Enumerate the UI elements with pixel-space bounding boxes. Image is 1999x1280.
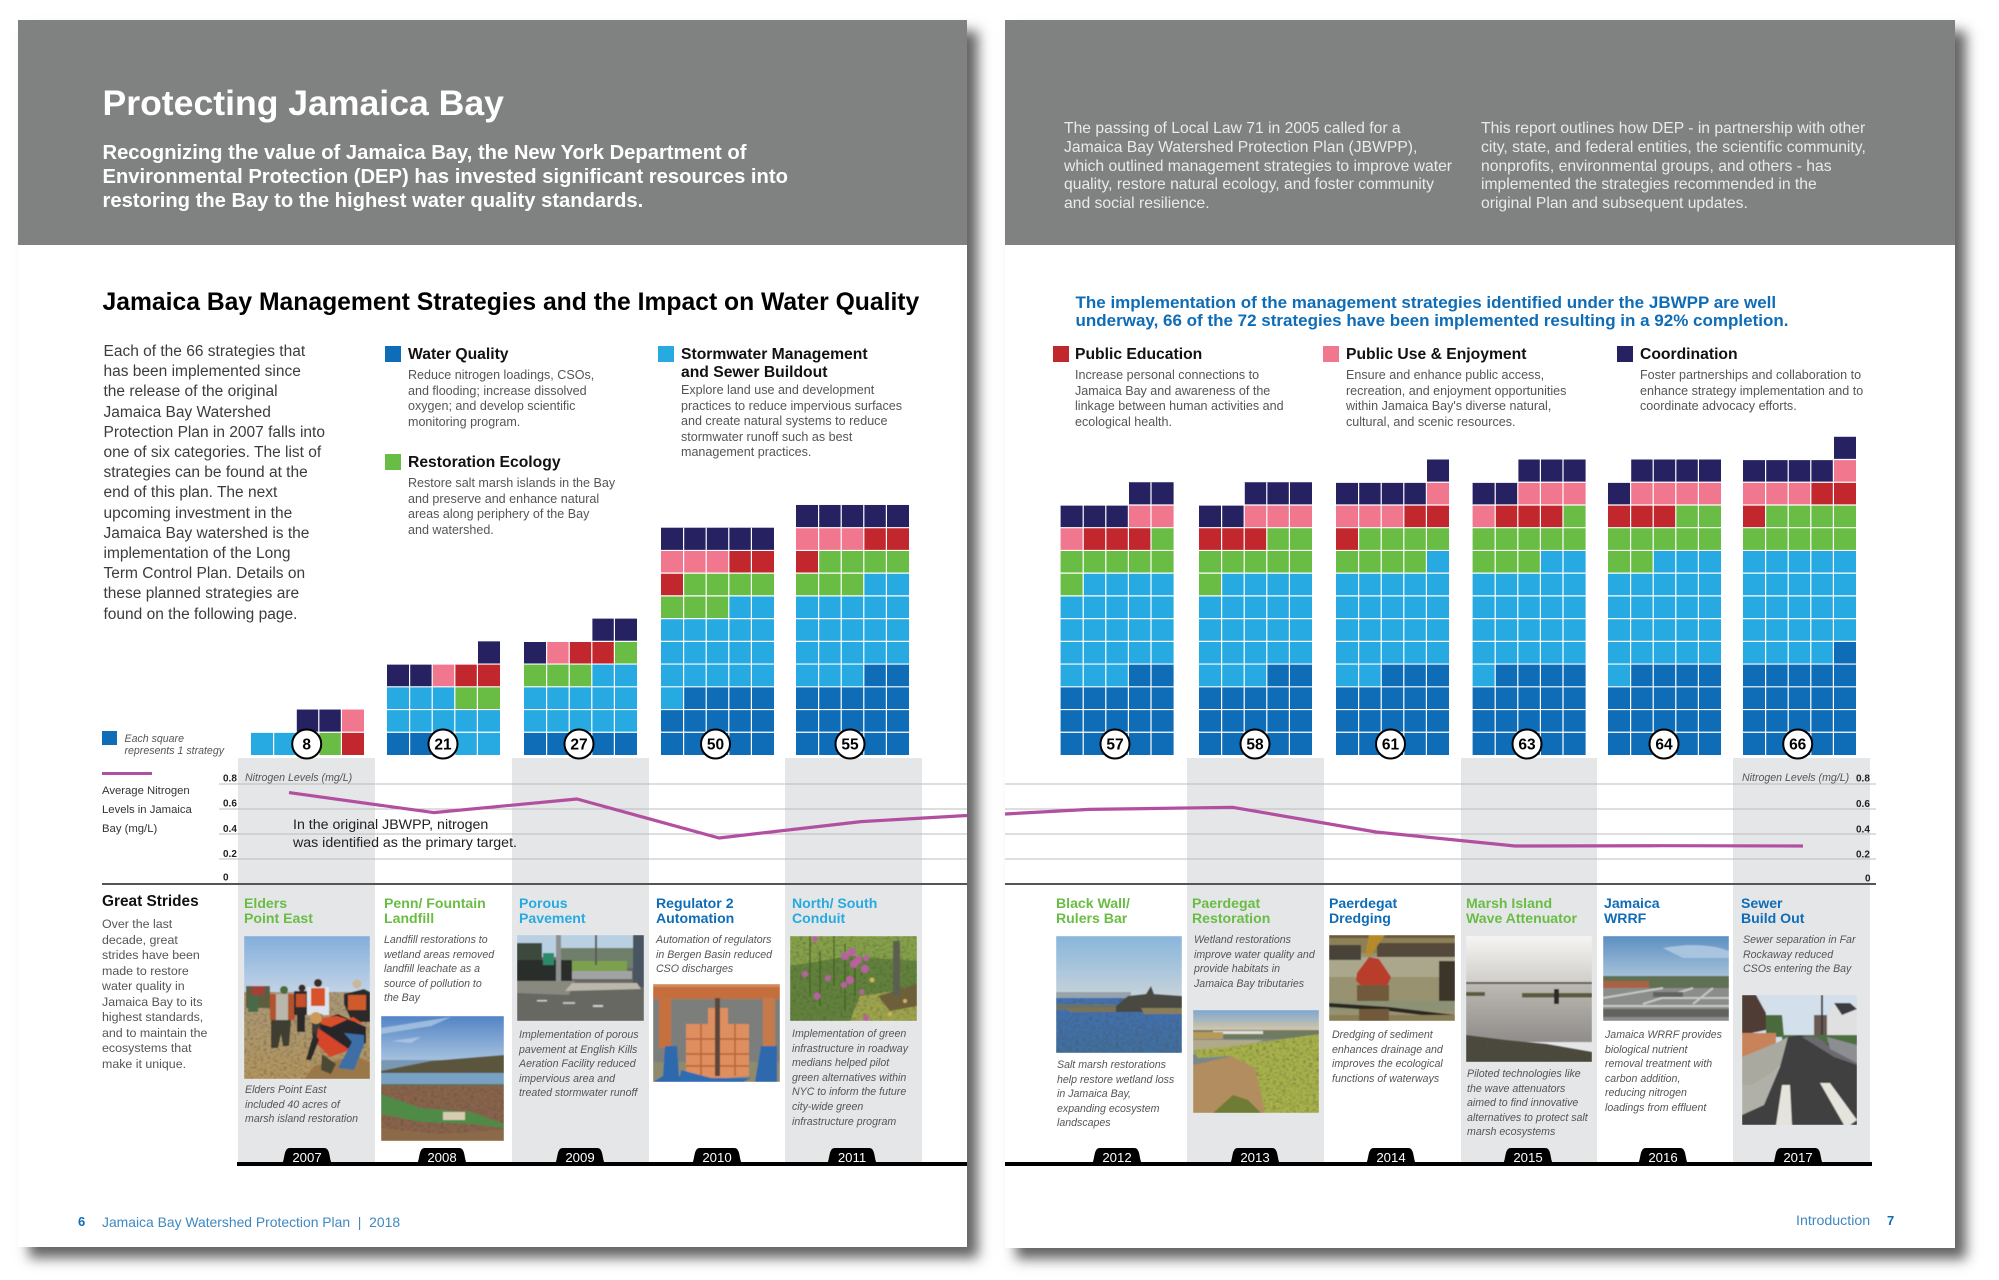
intro paragraph: the release of the original <box>104 383 278 400</box>
caption: North/ South Conduit: green alternatives within <box>792 1072 906 1084</box>
legend: public education: Jamaica Bay and awareness of the <box>1075 384 1270 398</box>
header text column 1 <box>1064 120 1452 212</box>
blue key message: underway, 66 of the 72 strategies have been implemented resulting in a 92% completion. <box>1076 311 1788 330</box>
year tab 2014 <box>1366 1148 1416 1162</box>
legend: nitrogen line: Levels in Jamaica <box>102 804 192 816</box>
caption: Paerdegat Dredging: Dredging of sediment <box>1332 1029 1433 1041</box>
column heading: Jamaica WRRF: WRRF <box>1604 910 1646 926</box>
legend: coordination: Coordination <box>1640 346 1738 363</box>
legend: restoration ecology: and watershed. <box>408 522 494 536</box>
count badges: 21 <box>434 736 452 754</box>
chart annotation: was identified as the primary target. <box>293 835 517 851</box>
column heading: Black Wall/ Rulers Bar: Rulers Bar <box>1056 910 1127 926</box>
intro paragraph: implementation of the Long <box>104 545 290 562</box>
legend: stormwater: Explore land use and development <box>681 383 874 397</box>
caption: Black Wall/ Rulers Bar <box>1057 1059 1174 1129</box>
caption: Black Wall/ Rulers Bar: expanding ecosystem <box>1057 1103 1159 1115</box>
header band: right page <box>1005 20 1955 245</box>
chart: nitrogen levels right <box>1004 772 1876 885</box>
caption: Porous Pavement: Aeration Facility reduced <box>519 1058 636 1070</box>
count badges: 55 <box>841 736 859 754</box>
column heading: Penn/ Fountain Landfill: Landfill <box>384 910 434 926</box>
legend: each square: represents 1 strategy <box>124 745 224 757</box>
legend: restoration ecology: and preserve and enhance natural <box>408 492 599 506</box>
chart annotation: In the original JBWPP, nitrogen <box>293 817 488 833</box>
bar 2013 <box>1199 482 1312 755</box>
year tab 2011: 2011 <box>838 1150 866 1165</box>
legend: public education: Public Education <box>1075 346 1202 363</box>
column heading: North/ South Conduit <box>792 895 877 926</box>
caption: Paerdegat Dredging: enhances drainage and <box>1332 1044 1443 1056</box>
great strides text: Great Strides <box>102 893 199 910</box>
header text column 2: city, state, and federal entities, the scientific community, <box>1481 139 1866 156</box>
caption: North/ South Conduit: NYC to inform the future <box>792 1086 906 1098</box>
chart: nitrogen levels left: Nitrogen Levels (mg/L) <box>245 772 352 784</box>
column heading: North/ South Conduit: North/ South <box>792 895 877 911</box>
caption: Paerdegat Restoration: Wetland restorations <box>1194 934 1291 946</box>
column heading: Paerdegat Restoration: Paerdegat <box>1192 895 1260 911</box>
caption: Marsh Island Wave Attenuator: the wave attenuators <box>1467 1083 1565 1095</box>
legend: public use: within Jamaica Bay's diverse natural, <box>1346 399 1551 413</box>
timeline bar left <box>237 1162 967 1166</box>
caption: North/ South Conduit: infrastructure in roadway <box>792 1043 908 1055</box>
great strides text: water quality in <box>102 979 185 993</box>
photo: North/ South Conduit <box>790 936 917 1021</box>
caption: Elders Point East <box>245 1084 358 1125</box>
column heading: Jamaica WRRF <box>1604 896 1660 926</box>
year tab 2012: 2012 <box>1102 1150 1132 1165</box>
caption: Porous Pavement: pavement at English Kills <box>519 1044 637 1056</box>
caption: Marsh Island Wave Attenuator: marsh ecosystems <box>1467 1126 1555 1138</box>
intro paragraph: these planned strategies are <box>104 585 299 602</box>
chart: nitrogen levels right: 0.8 <box>1856 774 1870 784</box>
year tab 2013 <box>1230 1148 1280 1162</box>
column heading: North/ South Conduit: Conduit <box>792 910 845 926</box>
count badges: 57 <box>1106 736 1124 754</box>
count badges <box>1100 730 1812 758</box>
legend: restoration ecology: areas along periphery of the Bay <box>408 507 589 521</box>
intro paragraph: Jamaica Bay Watershed <box>104 404 271 421</box>
caption: Sewer Build Out: Rockaway reduced <box>1743 949 1833 961</box>
caption: Black Wall/ Rulers Bar: help restore wetland loss <box>1057 1074 1174 1086</box>
column band 2007 <box>238 758 375 1162</box>
bar 2008 <box>387 641 500 755</box>
chart: nitrogen levels right: Nitrogen Levels (mg/L) <box>1742 772 1849 784</box>
intro paragraph: found on the following page. <box>104 606 297 623</box>
header text column 2: This report outlines how DEP - in partnership with other <box>1481 120 1865 137</box>
column heading: Regulator 2 Automation: Automation <box>656 910 734 926</box>
header text column 1: quality, restore natural ecology, and foster community <box>1064 176 1434 193</box>
photo: Sewer Build Out <box>1742 995 1857 1125</box>
great strides text: made to restore <box>102 964 189 978</box>
panel: right page <box>1005 20 1955 1248</box>
great strides text: make it unique. <box>102 1056 186 1070</box>
year tab 2017 <box>1774 1148 1822 1162</box>
year tab 2016 <box>1638 1148 1688 1162</box>
caption: Sewer Build Out: Sewer separation in Far <box>1743 934 1855 946</box>
count badges <box>292 730 864 758</box>
column heading: Sewer Build Out: Sewer <box>1741 895 1783 911</box>
legend: coordination <box>1617 346 1863 413</box>
great strides text: highest standards, <box>102 1010 203 1024</box>
year tab 2010 <box>692 1148 742 1162</box>
legend: stormwater: Stormwater Management <box>681 346 868 363</box>
footer left: Jamaica Bay Watershed Protection Plan | 2018 <box>102 1214 400 1230</box>
legend: public education: Increase personal connections to <box>1075 368 1259 382</box>
year tab 2015: 2015 <box>1513 1150 1543 1165</box>
count badges: 63 <box>1518 736 1536 754</box>
title: Protecting Jamaica Bay <box>102 83 504 123</box>
legend: public use: recreation, and enjoyment opportunities <box>1346 384 1566 398</box>
caption: Elders Point East: Elders Point East <box>245 1084 326 1096</box>
bar 2009 <box>524 619 637 755</box>
year tab 2007 <box>282 1148 332 1162</box>
chart: nitrogen levels left: 0.4 <box>223 824 237 835</box>
legend: stormwater: stormwater runoff such as best <box>681 430 852 444</box>
column heading: Porous Pavement <box>519 895 586 926</box>
subtitle: Recognizing the value of Jamaica Bay, the New York Department of <box>102 142 746 164</box>
photo: Jamaica WRRF <box>1603 936 1729 1021</box>
year tab 2008: 2008 <box>427 1150 457 1165</box>
caption: Paerdegat Restoration <box>1194 934 1315 990</box>
column heading: Penn/ Fountain Landfill: Penn/ Fountain <box>384 895 486 911</box>
intro paragraph: Term Control Plan. Details on <box>104 565 305 582</box>
intro paragraph <box>104 343 325 623</box>
count badges: 61 <box>1382 736 1399 754</box>
header band: left page <box>18 20 967 245</box>
intro paragraph: upcoming investment in the <box>104 505 292 522</box>
bar 2015 <box>1473 460 1586 755</box>
chart: nitrogen levels left: 0.8 <box>223 774 237 784</box>
header text column 1: and social resilience. <box>1064 195 1210 212</box>
column heading: Paerdegat Restoration <box>1192 895 1270 926</box>
timeline bar right <box>1005 1162 1872 1166</box>
caption: Jamaica WRRF: Jamaica WRRF provides <box>1605 1029 1722 1041</box>
intro paragraph: Jamaica Bay watershed is the <box>104 525 309 542</box>
caption: Penn/ Fountain Landfill: Landfill restorations to <box>384 934 488 946</box>
column heading: Paerdegat Dredging <box>1329 896 1397 926</box>
legend: restoration ecology <box>385 454 616 536</box>
great strides text: decade, great <box>102 932 178 946</box>
legend: water quality: Water Quality <box>408 346 509 363</box>
photo: Elders Point East <box>244 936 370 1079</box>
column heading: Sewer Build Out <box>1741 896 1804 926</box>
column band 2015 <box>1461 758 1597 1162</box>
count badges: 64 <box>1655 736 1673 754</box>
photo: Marsh Island Wave Attenuator <box>1466 936 1592 1062</box>
great strides text: Over the last <box>102 917 172 931</box>
column heading: Regulator 2 Automation: Regulator 2 <box>656 895 734 911</box>
header text column 2: original Plan and subsequent updates. <box>1481 195 1748 212</box>
legend: public education: linkage between human activities and <box>1075 399 1284 413</box>
count badges: 58 <box>1246 736 1264 754</box>
legend: each square: Each square <box>124 733 184 745</box>
legend: public use: Ensure and enhance public access, <box>1346 368 1544 382</box>
legend: coordination: Foster partnerships and collaboration to <box>1640 368 1861 382</box>
great strides text: strides have been <box>102 948 200 962</box>
caption: Porous Pavement <box>518 1029 639 1099</box>
header text column 2: nonprofits, environmental groups, and others - has <box>1481 158 1832 175</box>
caption: Paerdegat Restoration: improve water quality and <box>1194 949 1315 961</box>
bar 2014 <box>1336 460 1449 755</box>
column heading: Black Wall/ Rulers Bar <box>1056 895 1130 926</box>
bar 2016 <box>1608 460 1721 755</box>
caption: Jamaica WRRF: loadings from effluent <box>1605 1102 1706 1114</box>
chart: nitrogen levels left: 0.6 <box>223 798 237 810</box>
column heading: Penn/ Fountain Landfill <box>384 895 486 926</box>
column heading: Paerdegat Dredging: Paerdegat <box>1329 895 1397 911</box>
legend: public use <box>1323 346 1566 428</box>
panel: left page <box>18 20 967 1247</box>
column heading: Elders Point East <box>244 895 313 926</box>
year tab 2014: 2014 <box>1376 1150 1406 1165</box>
caption: Penn/ Fountain Landfill: source of pollution to <box>384 978 482 990</box>
year tab 2009 <box>556 1148 604 1162</box>
legend: stormwater: practices to reduce impervious surfaces <box>681 398 902 412</box>
column heading: Paerdegat Restoration: Restoration <box>1192 910 1270 926</box>
caption: North/ South Conduit: infrastructure program <box>792 1116 896 1128</box>
header text column 1: The passing of Local Law 71 in 2005 called for a <box>1064 120 1401 137</box>
subtitle: restoring the Bay to the highest water quality standards. <box>102 190 643 212</box>
legend: nitrogen line: Average Nitrogen <box>102 784 190 796</box>
legend: stormwater: and Sewer Buildout <box>681 364 827 381</box>
column heading: Marsh Island Wave Attenuator <box>1466 896 1577 926</box>
column band 2013 <box>1187 758 1324 1162</box>
caption: Sewer Build Out <box>1743 933 1855 977</box>
caption: Regulator 2 Automation: Automation of regulators <box>656 934 771 946</box>
year tab 2010: 2010 <box>702 1150 732 1165</box>
caption: Black Wall/ Rulers Bar: in Jamaica Bay, <box>1057 1088 1131 1100</box>
chart: nitrogen levels right: 0 <box>1865 874 1871 884</box>
legend: public education <box>1053 346 1284 428</box>
intro paragraph: Each of the 66 strategies that <box>104 343 305 360</box>
legend: stormwater <box>658 346 902 459</box>
great strides text: and to maintain the <box>102 1026 207 1040</box>
count badges: 66 <box>1789 736 1807 754</box>
year tab 2017: 2017 <box>1783 1150 1813 1165</box>
column heading: Marsh Island Wave Attenuator: Wave Attenuator <box>1466 910 1577 926</box>
caption: Paerdegat Dredging: functions of waterways <box>1332 1073 1439 1085</box>
chart: nitrogen levels left: 0 <box>223 872 229 884</box>
column heading: Porous Pavement: Porous <box>519 895 568 911</box>
column heading: Regulator 2 Automation <box>656 895 734 926</box>
caption: Regulator 2 Automation: in Bergen Basin reduced <box>656 949 772 961</box>
header text column 1: which outlined management strategies to improve water <box>1064 158 1452 175</box>
caption: North/ South Conduit: Implementation of green <box>792 1028 906 1040</box>
caption: Penn/ Fountain Landfill: the Bay <box>384 992 420 1004</box>
caption: Elders Point East: included 40 acres of <box>245 1099 340 1111</box>
caption: Penn/ Fountain Landfill: wetland areas removed <box>384 949 494 961</box>
caption: Penn/ Fountain Landfill <box>384 934 494 1004</box>
caption: Paerdegat Dredging <box>1332 1028 1443 1086</box>
legend: water quality: oxygen; and develop scientific <box>408 399 575 413</box>
photo: Paerdegat Dredging <box>1329 935 1455 1021</box>
count badges: 8 <box>302 736 311 754</box>
page number 6: 6 <box>78 1214 85 1229</box>
bar 2010 <box>661 528 774 755</box>
intro paragraph: Protection Plan in 2007 falls into <box>104 424 325 441</box>
column heading: Paerdegat Dredging: Dredging <box>1329 910 1391 926</box>
column heading: Porous Pavement: Pavement <box>519 910 586 926</box>
subtitle <box>102 142 788 212</box>
year tab 2013: 2013 <box>1240 1150 1270 1165</box>
blue key message <box>1076 293 1788 330</box>
chart: nitrogen levels left: 0.2 <box>223 849 237 860</box>
caption: Marsh Island Wave Attenuator: alternatives to protect salt <box>1467 1112 1588 1124</box>
caption: North/ South Conduit <box>792 1028 908 1128</box>
year tab 2007: 2007 <box>292 1150 322 1165</box>
column heading: Jamaica WRRF: Jamaica <box>1604 895 1660 911</box>
year tab 2012 <box>1092 1148 1142 1162</box>
caption: Paerdegat Dredging: improves the ecological <box>1332 1058 1443 1070</box>
caption: Porous Pavement: impervious area and <box>519 1073 615 1085</box>
caption: Marsh Island Wave Attenuator <box>1467 1067 1588 1140</box>
photo: Porous Pavement <box>517 935 644 1021</box>
intro paragraph: one of six categories. The list of <box>104 444 321 461</box>
page number 7: 7 <box>1887 1213 1894 1228</box>
caption: Marsh Island Wave Attenuator: Piloted technologies like <box>1467 1068 1581 1080</box>
caption: Black Wall/ Rulers Bar: Salt marsh restorations <box>1057 1059 1166 1071</box>
caption: Jamaica WRRF: carbon addition, <box>1605 1073 1680 1085</box>
great strides text: ecosystems that <box>102 1041 192 1055</box>
chart: nitrogen levels right: 0.6 <box>1856 799 1870 810</box>
legend: nitrogen line <box>102 772 192 834</box>
stacked bars: left page <box>251 504 909 760</box>
column heading: Black Wall/ Rulers Bar: Black Wall/ <box>1056 895 1130 911</box>
legend: water quality: Reduce nitrogen loadings, CSOs, <box>408 368 594 382</box>
great strides text <box>102 893 207 1070</box>
column heading: Marsh Island Wave Attenuator: Marsh Island <box>1466 895 1552 911</box>
count badges: 50 <box>707 736 724 754</box>
legend: stormwater: management practices. <box>681 445 811 459</box>
legend: public use: Public Use & Enjoyment <box>1346 346 1526 363</box>
bar 2017 <box>1743 437 1856 755</box>
column band 2011 <box>785 758 922 1162</box>
caption: Black Wall/ Rulers Bar: landscapes <box>1057 1117 1111 1129</box>
intro paragraph: has been implemented since <box>104 363 301 380</box>
subtitle: Environmental Protection (DEP) has invested significant resources into <box>102 166 788 188</box>
legend: coordination: coordinate advocacy efforts. <box>1640 399 1797 413</box>
bar 2012 <box>1061 482 1174 755</box>
photo: Paerdegat Restoration <box>1193 1010 1319 1113</box>
caption: Sewer Build Out: CSOs entering the Bay <box>1743 963 1851 975</box>
caption: Jamaica WRRF: reducing nitrogen <box>1605 1087 1687 1099</box>
header text column 1: Jamaica Bay Watershed Protection Plan (JBWPP), <box>1064 139 1417 156</box>
column band 2017 <box>1733 758 1870 1162</box>
legend: public use: cultural, and scenic resources. <box>1346 414 1515 428</box>
bar 2007 <box>251 710 364 755</box>
legend: stormwater: and create natural systems to reduce <box>681 414 887 428</box>
year tab 2016: 2016 <box>1648 1150 1678 1165</box>
caption: Jamaica WRRF: biological nutrient <box>1605 1044 1687 1056</box>
chart: nitrogen levels right: 0.4 <box>1856 824 1870 836</box>
column heading: Elders Point East: Point East <box>244 910 313 926</box>
caption: Porous Pavement: treated stormwater runoff <box>519 1087 637 1099</box>
count badges: 27 <box>570 736 588 754</box>
chart annotation <box>293 817 517 851</box>
header text column 2 <box>1481 120 1866 212</box>
caption: Penn/ Fountain Landfill: landfill leachate as a <box>384 963 480 975</box>
intro paragraph: end of this plan. The next <box>104 484 277 501</box>
chart: nitrogen levels right: 0.2 <box>1856 850 1870 860</box>
caption: Paerdegat Restoration: provide habitats in <box>1194 963 1280 975</box>
legend: nitrogen line: Bay (mg/L) <box>102 822 157 834</box>
chart: nitrogen levels left <box>102 772 968 885</box>
legend: public education: ecological health. <box>1075 414 1172 428</box>
legend: each square <box>102 731 224 757</box>
year tab 2009: 2009 <box>565 1150 595 1165</box>
section heading: Jamaica Bay Management Strategies and the Impact on Water Quality <box>102 289 919 316</box>
year tab 2011 <box>828 1148 876 1162</box>
caption: Paerdegat Restoration: Jamaica Bay tributaries <box>1194 978 1304 990</box>
photo: Penn/ Fountain Landfill <box>381 1016 504 1141</box>
caption: North/ South Conduit: city-wide green <box>792 1101 863 1113</box>
legend: coordination: enhance strategy implementation and to <box>1640 384 1863 398</box>
caption: Regulator 2 Automation: CSO discharges <box>656 963 733 975</box>
photo: Regulator 2 Automation <box>653 984 780 1082</box>
legend: water quality <box>385 346 594 428</box>
caption: Regulator 2 Automation <box>656 934 772 975</box>
legend: restoration ecology: Restoration Ecology <box>408 454 561 471</box>
caption: Jamaica WRRF: removal treatment with <box>1605 1058 1712 1070</box>
column heading: Sewer Build Out: Build Out <box>1741 910 1804 926</box>
footer right: Introduction <box>1796 1213 1870 1229</box>
year tab 2008 <box>418 1148 466 1162</box>
column heading: Elders Point East: Elders <box>244 895 287 911</box>
legend: water quality: and flooding; increase dissolved <box>408 384 587 398</box>
year tab 2015 <box>1504 1148 1552 1162</box>
legend: water quality: monitoring program. <box>408 414 520 428</box>
column band 2009 <box>512 758 649 1162</box>
caption: Marsh Island Wave Attenuator: aimed to find innovative <box>1467 1097 1578 1109</box>
caption: Jamaica WRRF <box>1605 1028 1722 1116</box>
photo: Black Wall/ Rulers Bar <box>1056 936 1182 1053</box>
caption: Porous Pavement: Implementation of porous <box>519 1029 639 1041</box>
caption: Elders Point East: marsh island restoration <box>245 1113 358 1125</box>
blue key message: The implementation of the management strategies identified under the JBWPP are well <box>1076 293 1776 312</box>
bar 2011 <box>796 505 909 755</box>
header text column 2: implemented the strategies recommended in the <box>1481 176 1817 193</box>
stacked bars: right page <box>1060 436 1856 760</box>
legend: restoration ecology: Restore salt marsh islands in the Bay <box>408 476 615 490</box>
intro paragraph: strategies can be found at the <box>104 464 308 481</box>
caption: North/ South Conduit: medians helped pilot <box>792 1057 889 1069</box>
great strides text: Jamaica Bay to its <box>102 994 203 1008</box>
